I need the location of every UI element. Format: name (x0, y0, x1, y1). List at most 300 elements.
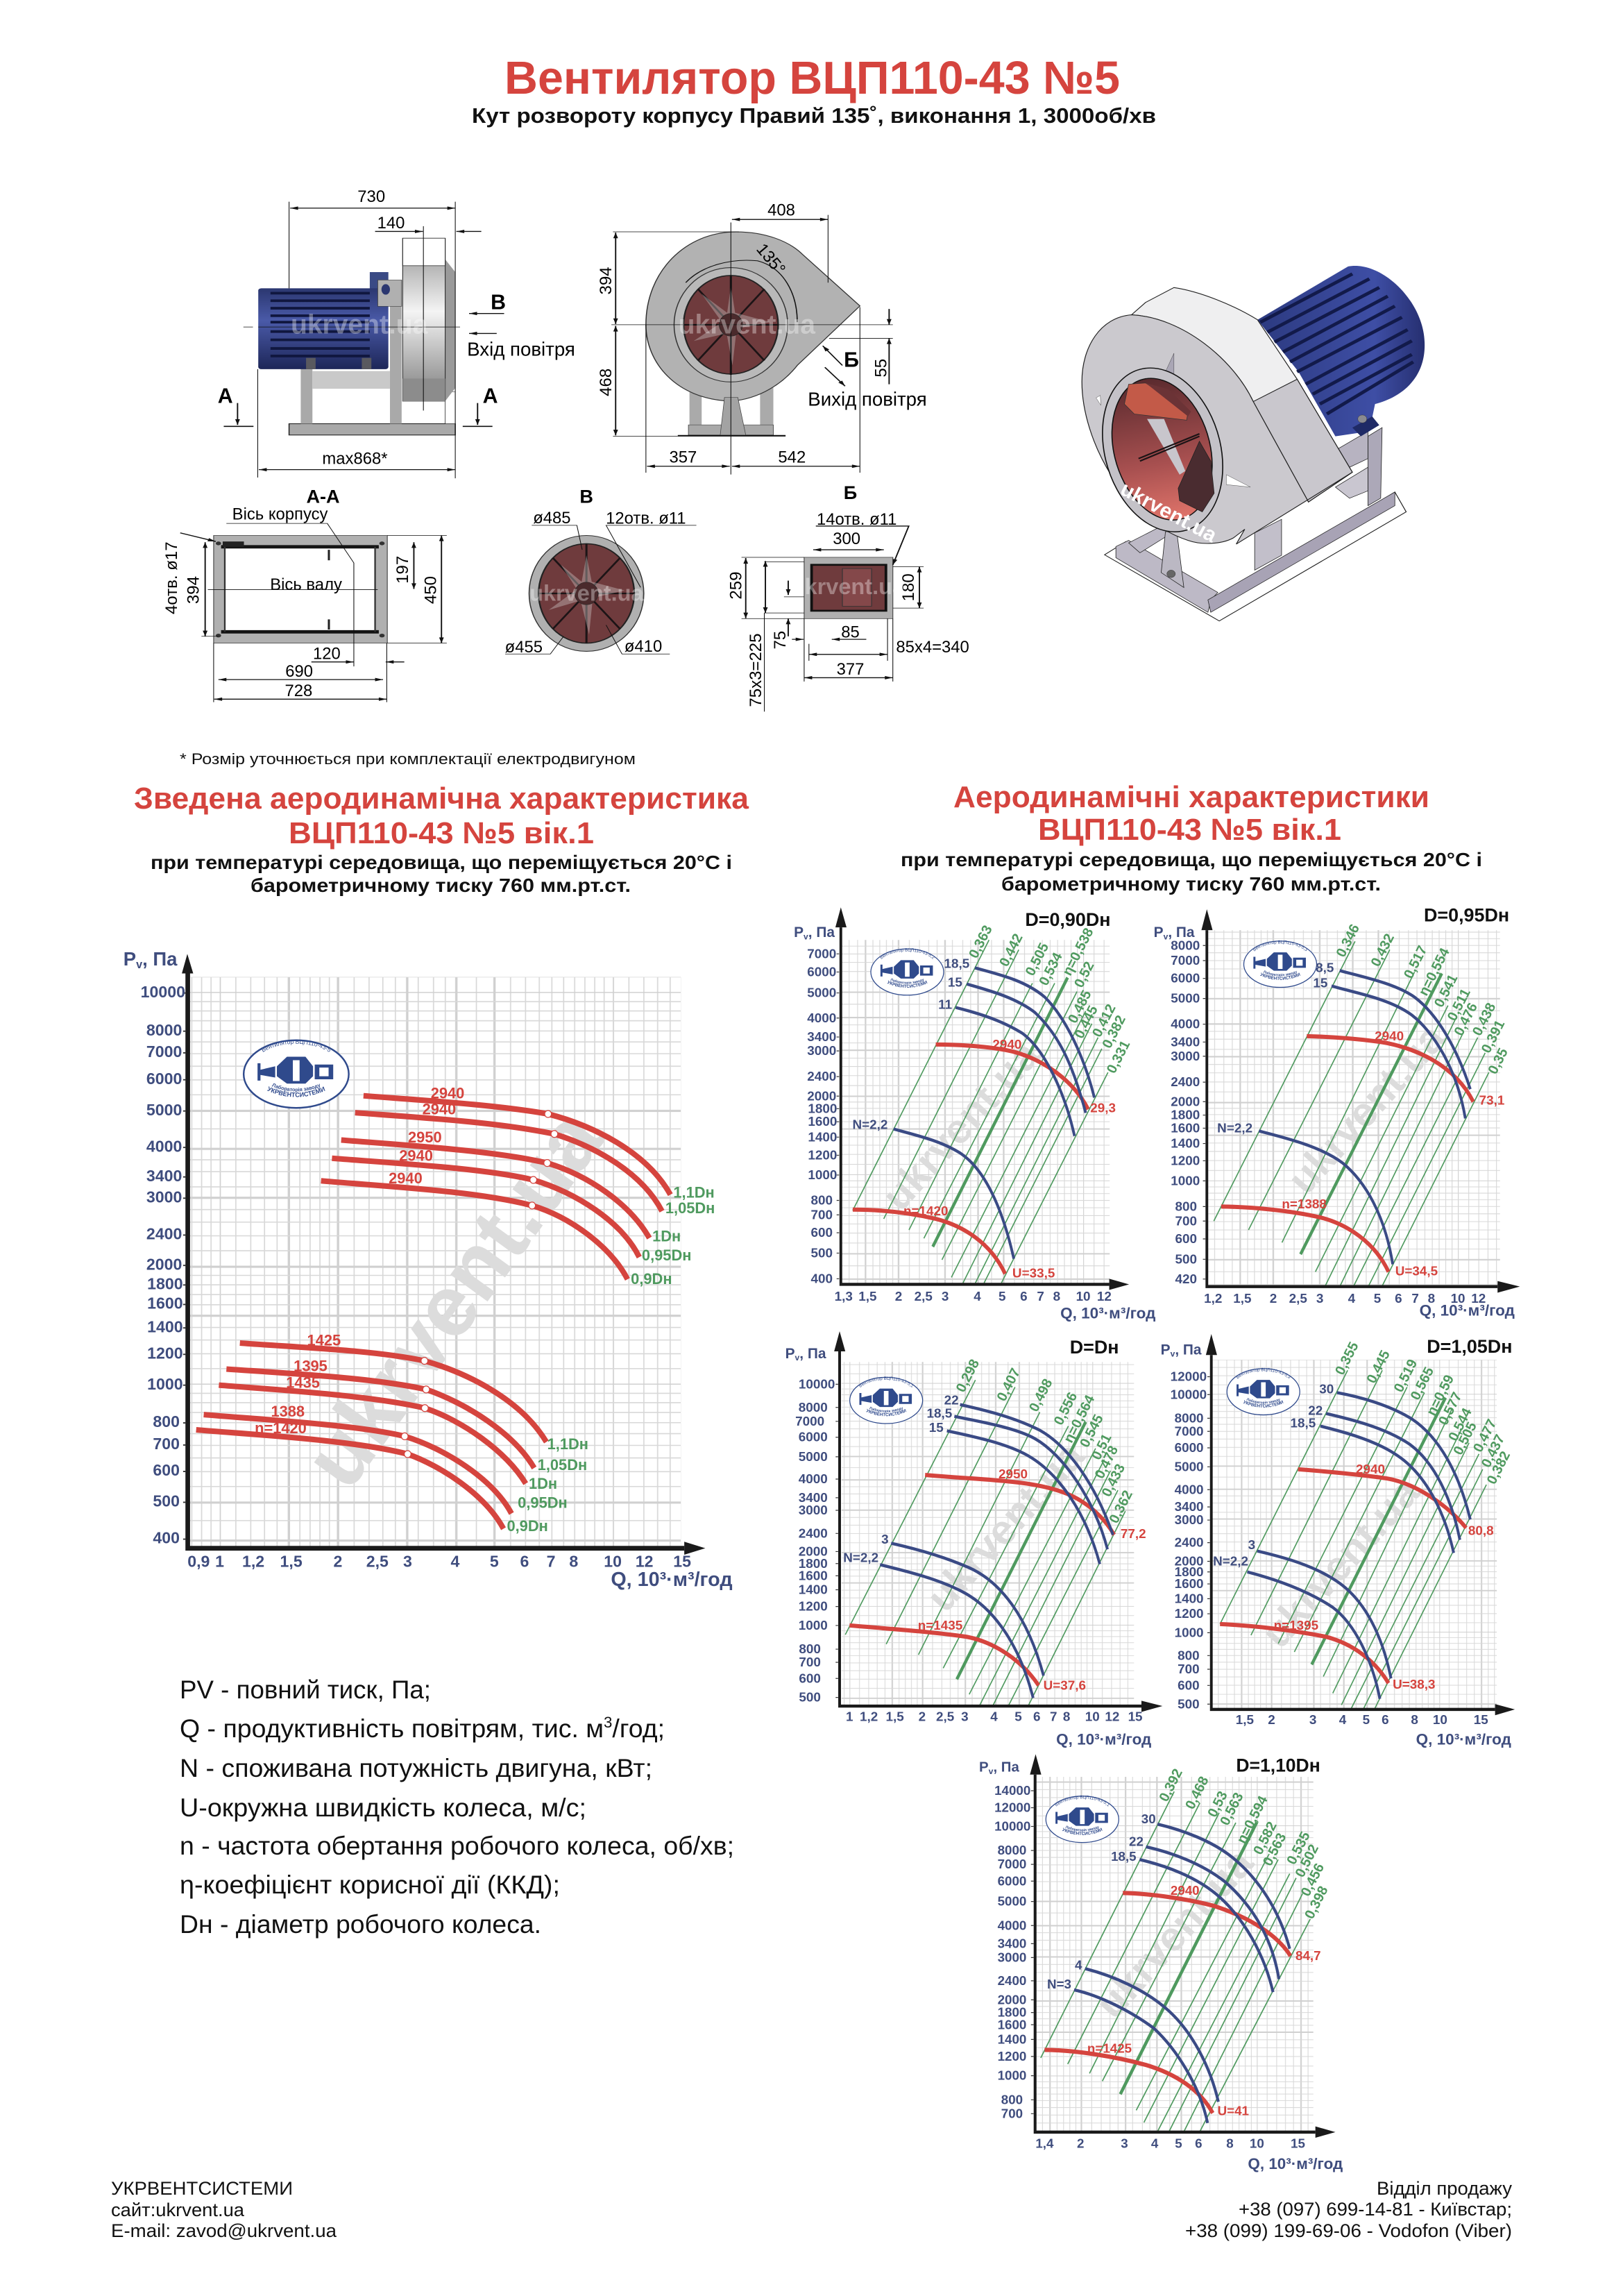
chart title: D=0,95Dн (1424, 904, 1509, 925)
y axis title: P (1161, 1342, 1171, 1358)
y axis title: P (979, 1760, 989, 1775)
axes (834, 1331, 1162, 1712)
watermark: ukrvent.ua (1252, 1469, 1428, 1657)
x axis labels (1204, 1292, 1486, 1306)
y axis labels: 3000 (998, 1950, 1026, 1965)
view Б: outlet flange: 85x4=340 (896, 638, 969, 657)
dimension: 55 (829, 309, 893, 385)
efficiency labels: 0,363 (966, 923, 996, 961)
view B: inlet flange (505, 485, 697, 657)
x axis labels: 12 (1105, 1710, 1119, 1725)
x axis labels: 6 (1395, 1292, 1402, 1306)
y axis labels: 800 (1178, 1648, 1200, 1663)
diameter labels: 0,9Dн (631, 1270, 672, 1288)
footer: sales department: Відділ продажу (1377, 2178, 1513, 2199)
logo (849, 1376, 923, 1424)
y axis labels: 1600 (808, 1115, 837, 1129)
efficiency labels: η=0,538 (1060, 926, 1097, 978)
heading: aerodynamic characteristics: Аеродинамічні характеристики (953, 780, 1429, 814)
y axis labels: 2400 (1175, 1536, 1204, 1551)
x axis labels: 4 (1151, 2136, 1159, 2150)
curves: low speed (196, 1343, 546, 1528)
efficiency labels: 0,433 (1099, 1462, 1128, 1499)
y axis labels: 4000 (146, 1137, 182, 1155)
y axis labels: 7000 (807, 947, 836, 961)
y axis labels: 2000 (807, 1089, 836, 1104)
speed labels: 2940 (431, 1084, 464, 1102)
y axis labels: 7000 (1171, 954, 1200, 968)
power curves (894, 968, 1094, 1258)
x axis labels: 8 (1053, 1290, 1060, 1304)
section A-A: base frame: 197 (393, 556, 412, 584)
view B: inlet flange: 12отв. ø11 (606, 509, 686, 528)
curve labels: 2940 (992, 1038, 1021, 1052)
y axis labels: 500 (1178, 1697, 1200, 1712)
legend text: /год; (612, 1714, 665, 1743)
x axis labels: 7 (547, 1552, 556, 1571)
y axis labels: 3400 (1175, 1500, 1204, 1514)
x axis labels: 6 (1033, 1710, 1041, 1725)
curve labels: n=1425 (1087, 2041, 1132, 2056)
curve labels (843, 1394, 1146, 1693)
y axis labels: 1000 (998, 2068, 1026, 2083)
x axis labels: 10 (1085, 1710, 1100, 1725)
x axis labels: 15 (1474, 1713, 1488, 1728)
section A-A: base frame: А-А (306, 485, 340, 507)
y axis labels: 1400 (998, 2032, 1026, 2046)
heading: aerodynamic characteristics: ВЦП110-43 №5 вік.1 (1038, 813, 1341, 847)
y axis labels: 5000 (1171, 992, 1200, 1006)
logo: УКРВЕНТСИСТЕМИ (887, 980, 927, 988)
x axis labels: 4 (450, 1552, 459, 1571)
y axis labels: 8000 (799, 1401, 828, 1415)
heading: summary characteristic (134, 782, 749, 896)
x axis labels: 10 (1433, 1713, 1447, 1728)
watermark: ukrvent.ua (873, 1031, 1048, 1219)
grid (842, 940, 1110, 1283)
heading: aerodynamic characteristics (901, 780, 1482, 895)
curve labels: 15 (1313, 977, 1327, 991)
y axis labels: 1800 (808, 1101, 837, 1116)
efficiency labels (1332, 1340, 1513, 1487)
efficiency labels: 0,563 (1217, 1790, 1247, 1828)
x axis labels: 15 (1128, 1710, 1143, 1725)
section markers A: А (483, 385, 498, 408)
efficiency labels: 0,52 (1071, 959, 1097, 990)
view Б: outlet flange: 377 (837, 660, 864, 679)
y axis labels: 2000 (998, 1992, 1026, 2007)
watermark: ukrvent.ua (291, 310, 428, 339)
y axis labels: 5000 (1175, 1460, 1204, 1474)
dimension: 408: 408 (767, 201, 795, 220)
y axis labels: 600 (811, 1226, 833, 1240)
y axis title: P (124, 948, 136, 970)
axes (182, 954, 705, 1555)
efficiency labels: 0,534 (1036, 949, 1066, 988)
x axis labels: 2,5 (366, 1552, 389, 1571)
efficiency lines (1220, 1370, 1486, 1708)
x axis labels: 12 (1097, 1290, 1112, 1304)
y axis labels: 14000 (994, 1783, 1030, 1798)
x axis labels: 10 (1250, 2136, 1264, 2150)
diameter labels: 0,9Dн (507, 1517, 548, 1535)
speed labels: 2940 (399, 1147, 433, 1165)
y axis labels: 1600 (1171, 1121, 1200, 1136)
y axis labels: 10000 (994, 1819, 1030, 1834)
legend text: PV - повний тиск, Па; (180, 1675, 431, 1704)
heading: aerodynamic characteristics: барометричному тиску 760 мм.рт.ст. (1001, 873, 1381, 895)
logo (1227, 1367, 1300, 1416)
speed labels: 2950 (408, 1129, 442, 1146)
curves: high speed (321, 1096, 670, 1279)
y axis title: , Па (799, 1346, 826, 1362)
section marker B and air outlet label: Б (844, 349, 859, 372)
logo: УКРВЕНТСИСТЕМИ (866, 1409, 906, 1416)
section A-A: base frame: 120 (313, 644, 341, 663)
logo (870, 948, 944, 995)
grid (1036, 1777, 1314, 2132)
x axis labels: 2 (1077, 2136, 1084, 2150)
y axis labels: 700 (153, 1435, 180, 1453)
efficiency labels: 0,535 (1284, 1830, 1314, 1867)
curve labels: N=2,2 (1217, 1121, 1252, 1136)
curve labels: 80,8 (1468, 1523, 1494, 1538)
efficiency labels: 0,392 (1157, 1766, 1186, 1805)
y axis labels: 500 (1175, 1252, 1197, 1267)
chart title: D=1,10Dн (1236, 1755, 1320, 1776)
diameter labels: 1,05Dн (665, 1199, 715, 1217)
efficiency lines (853, 940, 1108, 1283)
dimension: 394 and 468: 394 (597, 267, 615, 295)
y axis labels: 700 (1001, 2106, 1023, 2120)
view B: inlet flange: ø410 (624, 637, 662, 656)
logo: Лабораторія заводу (272, 1083, 320, 1092)
legend text: n - частота обертання робочого колеса, об/хв; (180, 1832, 734, 1860)
y axis labels: 2400 (799, 1526, 828, 1541)
x axis labels: 15 (673, 1552, 691, 1571)
efficiency labels: 0,478 (1092, 1444, 1121, 1481)
efficiency labels: η=0,594 (1234, 1793, 1271, 1846)
y axis labels: 1400 (147, 1317, 183, 1335)
y axis labels: 3000 (807, 1044, 836, 1058)
curve labels: N=2,2 (852, 1117, 887, 1132)
efficiency labels: 0,476 (1452, 1000, 1481, 1038)
x axis title: Q, 10³·м³/год (1060, 1304, 1155, 1322)
grid (842, 1362, 1134, 1705)
y axis labels: 800 (153, 1412, 180, 1430)
x axis labels: 1 (215, 1552, 224, 1571)
efficiency labels: 0,51 (1089, 1431, 1114, 1462)
y axis labels: 12000 (994, 1800, 1030, 1815)
efficiency labels: 0,346 (1334, 922, 1363, 960)
efficiency labels: 0,582 (1250, 1819, 1280, 1857)
legend text: Q - продуктивність повітрям, тис. м (180, 1714, 598, 1743)
curve labels: 18,5 (927, 1407, 952, 1421)
y axis labels: 4000 (807, 1011, 836, 1026)
y axis labels: 2400 (807, 1070, 836, 1084)
y axis labels: 3400 (1171, 1035, 1200, 1049)
motor (1257, 266, 1425, 437)
curve labels (1213, 1383, 1494, 1692)
watermark: ukrvent.ua (917, 1433, 1093, 1620)
heading: summary characteristic: барометричному тиску 760 мм.рт.ст. (250, 875, 631, 896)
x axis labels: 2 (919, 1710, 926, 1725)
y axis labels: 1000 (808, 1168, 837, 1183)
curve labels: 8,5 (1316, 961, 1334, 975)
y axis labels: 1600 (147, 1294, 183, 1312)
view Б: outlet flange: 259 (726, 572, 745, 600)
y axis labels: 2400 (146, 1225, 182, 1243)
y axis labels: 1800 (1171, 1108, 1200, 1123)
section A-A: base frame: Вісь корпусу (232, 505, 328, 524)
power curves (880, 1405, 1113, 1698)
section A-A: base frame: 394 (184, 576, 203, 604)
x axis labels: 8 (1226, 2136, 1234, 2150)
y axis labels: 1800 (799, 1557, 828, 1571)
y axis labels: 8000 (1171, 938, 1200, 953)
logo (1045, 1795, 1119, 1843)
y axis title: , Па (1175, 1342, 1202, 1358)
x axis title: Q, 10³·м³/год (611, 1569, 733, 1591)
curve labels: n=1420 (903, 1204, 949, 1219)
x axis labels (835, 1290, 1112, 1304)
x axis labels: 1,5 (1233, 1292, 1251, 1306)
efficiency labels: 0,331 (1104, 1038, 1133, 1076)
y axis labels: 2000 (1171, 1095, 1200, 1109)
curve labels: 22 (1129, 1834, 1144, 1849)
y axis labels: 5000 (807, 986, 836, 1001)
subtitle: Кут розвороту корпусу Правий 135˚, виконання 1, 3000об/хв (472, 103, 1156, 128)
diameter labels: 0,95Dн (642, 1247, 691, 1264)
speed curves (853, 1045, 1088, 1274)
speed curves (849, 1475, 1114, 1685)
logo: Лабораторія заводу (869, 1406, 903, 1413)
y axis labels: 8000 (146, 1021, 182, 1039)
footnote: * Розмір уточнюється при комплектації електродвигуном (180, 750, 636, 768)
y axis labels: 600 (1178, 1678, 1200, 1693)
axes (835, 907, 1129, 1290)
x axis labels: 3 (942, 1290, 949, 1304)
efficiency labels: 0,505 (1023, 940, 1052, 979)
chart title: D=Dн (1070, 1337, 1119, 1358)
x axis labels: 2 (895, 1290, 902, 1304)
x axis labels: 6 (1382, 1713, 1389, 1728)
x axis title: Q, 10³·м³/год (1420, 1301, 1515, 1319)
x axis labels: 10 (1076, 1290, 1091, 1304)
section A-A: base frame: 690 (285, 662, 313, 681)
diameter labels: 1Dн (652, 1228, 681, 1245)
view Б: outlet flange: ukrvent.ua (791, 574, 906, 599)
axes (1206, 1334, 1515, 1715)
y axis labels: 600 (153, 1461, 180, 1479)
legend text: U-окружна швидкість колеса, м/с; (180, 1793, 586, 1822)
x axis title: Q, 10³·м³/год (1416, 1730, 1511, 1748)
x axis labels: 0,9 (187, 1552, 210, 1571)
y axis labels: 800 (1001, 2092, 1023, 2107)
curve labels: N=3 (1047, 1977, 1071, 1991)
view Б: outlet flange: Б (844, 482, 857, 503)
y axis labels: 400 (811, 1272, 833, 1286)
x axis labels: 8 (1428, 1292, 1435, 1306)
y axis labels: 2000 (146, 1255, 182, 1273)
dimension: 394 and 468 (597, 233, 615, 435)
logo: Вентилятор ВЦП110-43-5,2 (880, 948, 935, 959)
logo: Вентилятор ВЦП110-43-5,3 (1253, 940, 1307, 951)
y axis labels: 1800 (998, 2005, 1026, 2020)
y axis labels: 1200 (1171, 1154, 1200, 1168)
section A-A: base frame: 4отв. ø17 (162, 541, 181, 614)
logo: Лабораторія заводу (1246, 1398, 1280, 1405)
y axis labels: 3400 (998, 1936, 1026, 1951)
x axis labels: 2,5 (1289, 1292, 1307, 1306)
isometric illustration of fan (1082, 266, 1425, 621)
section marker and air inlet label: Вхід повітря (467, 338, 575, 360)
efficiency labels: 0,445 (1072, 1003, 1101, 1041)
x axis labels: 1,2 (860, 1710, 878, 1725)
x axis labels: 7 (1037, 1290, 1044, 1304)
curve labels: 18,5 (1111, 1849, 1137, 1864)
speed labels: n=1420 (255, 1419, 307, 1437)
drawing: front view of fan (611, 222, 893, 475)
curve labels: 30 (1319, 1383, 1334, 1397)
view Б: outlet flange: 75x3=225 (747, 634, 765, 707)
x axis labels: 3 (1316, 1292, 1323, 1306)
y axis title: v (1164, 931, 1169, 941)
legend text: 3 (604, 1714, 612, 1731)
footer: sales department: +38 (099) 199-69-06 - Vodofon (Viber) (1185, 2220, 1512, 2241)
chart title: D=0,90Dн (1025, 909, 1111, 930)
y axis labels: 500 (799, 1691, 821, 1705)
y axis labels: 3000 (1171, 1049, 1200, 1064)
speed labels: 1388 (271, 1403, 305, 1420)
y axis labels: 3000 (1175, 1513, 1204, 1528)
logo (1243, 940, 1317, 988)
view Б: outlet flange: 85 (841, 623, 860, 641)
efficiency labels: 0,391 (1479, 1018, 1508, 1056)
axes (1201, 909, 1520, 1293)
y axis labels: 7000 (146, 1043, 182, 1061)
curve labels: U=37,6 (1044, 1678, 1086, 1693)
y axis labels: 3000 (146, 1188, 182, 1206)
y axis labels: 700 (1178, 1662, 1200, 1677)
section markers A (218, 385, 498, 426)
diameter labels: 1Dн (529, 1475, 557, 1492)
dimension: 55: 55 (872, 359, 890, 378)
x axis labels: 5 (1175, 2136, 1182, 2150)
efficiency labels: 0,563 (1260, 1831, 1289, 1868)
x axis labels: 2 (1270, 1292, 1277, 1306)
y axis labels: 4000 (1175, 1483, 1204, 1497)
x axis labels: 5 (999, 1290, 1006, 1304)
x axis labels: 7 (1050, 1710, 1057, 1725)
curve labels: U=38,3 (1393, 1678, 1436, 1692)
inlet flange and impeller (1086, 358, 1239, 541)
y axis title: , Па (808, 925, 835, 940)
x axis labels: 3 (1121, 2136, 1128, 2150)
y axis labels (994, 1783, 1030, 2120)
x axis labels: 12 (636, 1552, 653, 1571)
angle label 135 degrees: 135° (752, 240, 789, 278)
efficiency labels: 0,382 (1484, 1449, 1513, 1487)
power curves (1259, 970, 1470, 1265)
x axis title: Q, 10³·м³/год (1248, 2155, 1343, 2172)
x axis title: Q, 10³·м³/год (1056, 1730, 1151, 1748)
x axis labels: 6 (1195, 2136, 1203, 2150)
y axis labels: 1000 (147, 1375, 183, 1393)
title: Вентилятор ВЦП110-43 №5 (504, 52, 1120, 104)
efficiency labels: 0,556 (1051, 1390, 1080, 1428)
dimension: 394 and 468: 468 (597, 369, 615, 396)
chart D=1,05Dн (1161, 1334, 1515, 1748)
efficiency labels: 0,511 (1445, 986, 1474, 1024)
dimension: 408 (732, 201, 828, 282)
x axis labels: 3 (961, 1710, 969, 1725)
y axis labels: 6000 (1171, 972, 1200, 986)
efficiency labels (953, 1357, 1136, 1526)
y axis labels: 4000 (799, 1472, 828, 1487)
heading: aerodynamic characteristics: при температурі середовища, що переміщується 20°С і (901, 849, 1482, 870)
curve labels: 15 (929, 1421, 944, 1435)
curve labels: N=2,2 (843, 1551, 878, 1566)
efficiency labels: 0,355 (1332, 1340, 1362, 1378)
efficiency labels: 0,505 (1451, 1419, 1480, 1458)
legend text (180, 1675, 734, 1939)
y axis labels: 4000 (998, 1918, 1026, 1932)
speed curves (1044, 1893, 1291, 2113)
logo: УКРВЕНТСИСТЕМИ (1243, 1400, 1284, 1408)
legend text: η-коефіцієнт корисної дії (ККД); (180, 1871, 560, 1899)
efficiency labels: 0,577 (1436, 1390, 1465, 1428)
y axis title: v (795, 1353, 800, 1362)
diameter labels (507, 1184, 715, 1535)
speed labels: 2940 (423, 1101, 456, 1118)
logo: УКРВЕНТСИСТЕМИ (267, 1086, 325, 1097)
operating points (401, 1111, 558, 1458)
speed labels: 1395 (294, 1358, 328, 1375)
technical drawings with dimensions (162, 187, 969, 711)
chart D=0,95Dн (1154, 904, 1520, 1319)
logo: Лабораторія заводу (890, 979, 924, 984)
efficiency labels: 0,35 (1486, 1046, 1511, 1077)
x axis labels: 1,2 (1204, 1292, 1222, 1306)
diameter labels: 0,95Dн (518, 1494, 568, 1512)
logo: Вентилятор ВЦП110-43-5,х (1237, 1367, 1291, 1379)
y axis labels: 5000 (799, 1450, 828, 1464)
y axis labels: 12000 (1171, 1370, 1207, 1385)
curve labels: 4 (1075, 1958, 1082, 1973)
section marker B and air outlet label: Вихід повітря (808, 388, 927, 410)
curve labels: n=1388 (1282, 1197, 1327, 1212)
y axis labels: 3000 (799, 1503, 828, 1518)
efficiency labels: 0,438 (1470, 1000, 1499, 1038)
efficiency lines (845, 1380, 1125, 1705)
x axis labels: 5 (1014, 1710, 1022, 1725)
view B: inlet flange: ø485 (533, 509, 571, 527)
speed labels: 1435 (286, 1374, 320, 1391)
efficiency labels: 0,544 (1445, 1406, 1475, 1444)
view Б: outlet flange (726, 482, 969, 711)
footer: company contacts (111, 2178, 337, 2241)
dimensions: 357 and 542 (646, 307, 860, 473)
y axis labels: 1200 (1175, 1607, 1204, 1621)
efficiency labels: 0,445 (1364, 1348, 1393, 1386)
curve labels: n=1435 (918, 1619, 962, 1633)
efficiency labels: 0,298 (953, 1357, 983, 1395)
dimensions: 357 and 542: 357 (670, 448, 697, 466)
y axis labels: 1000 (799, 1619, 828, 1633)
footer: sales department (1185, 2178, 1513, 2241)
curve labels: 29,3 (1090, 1101, 1116, 1116)
